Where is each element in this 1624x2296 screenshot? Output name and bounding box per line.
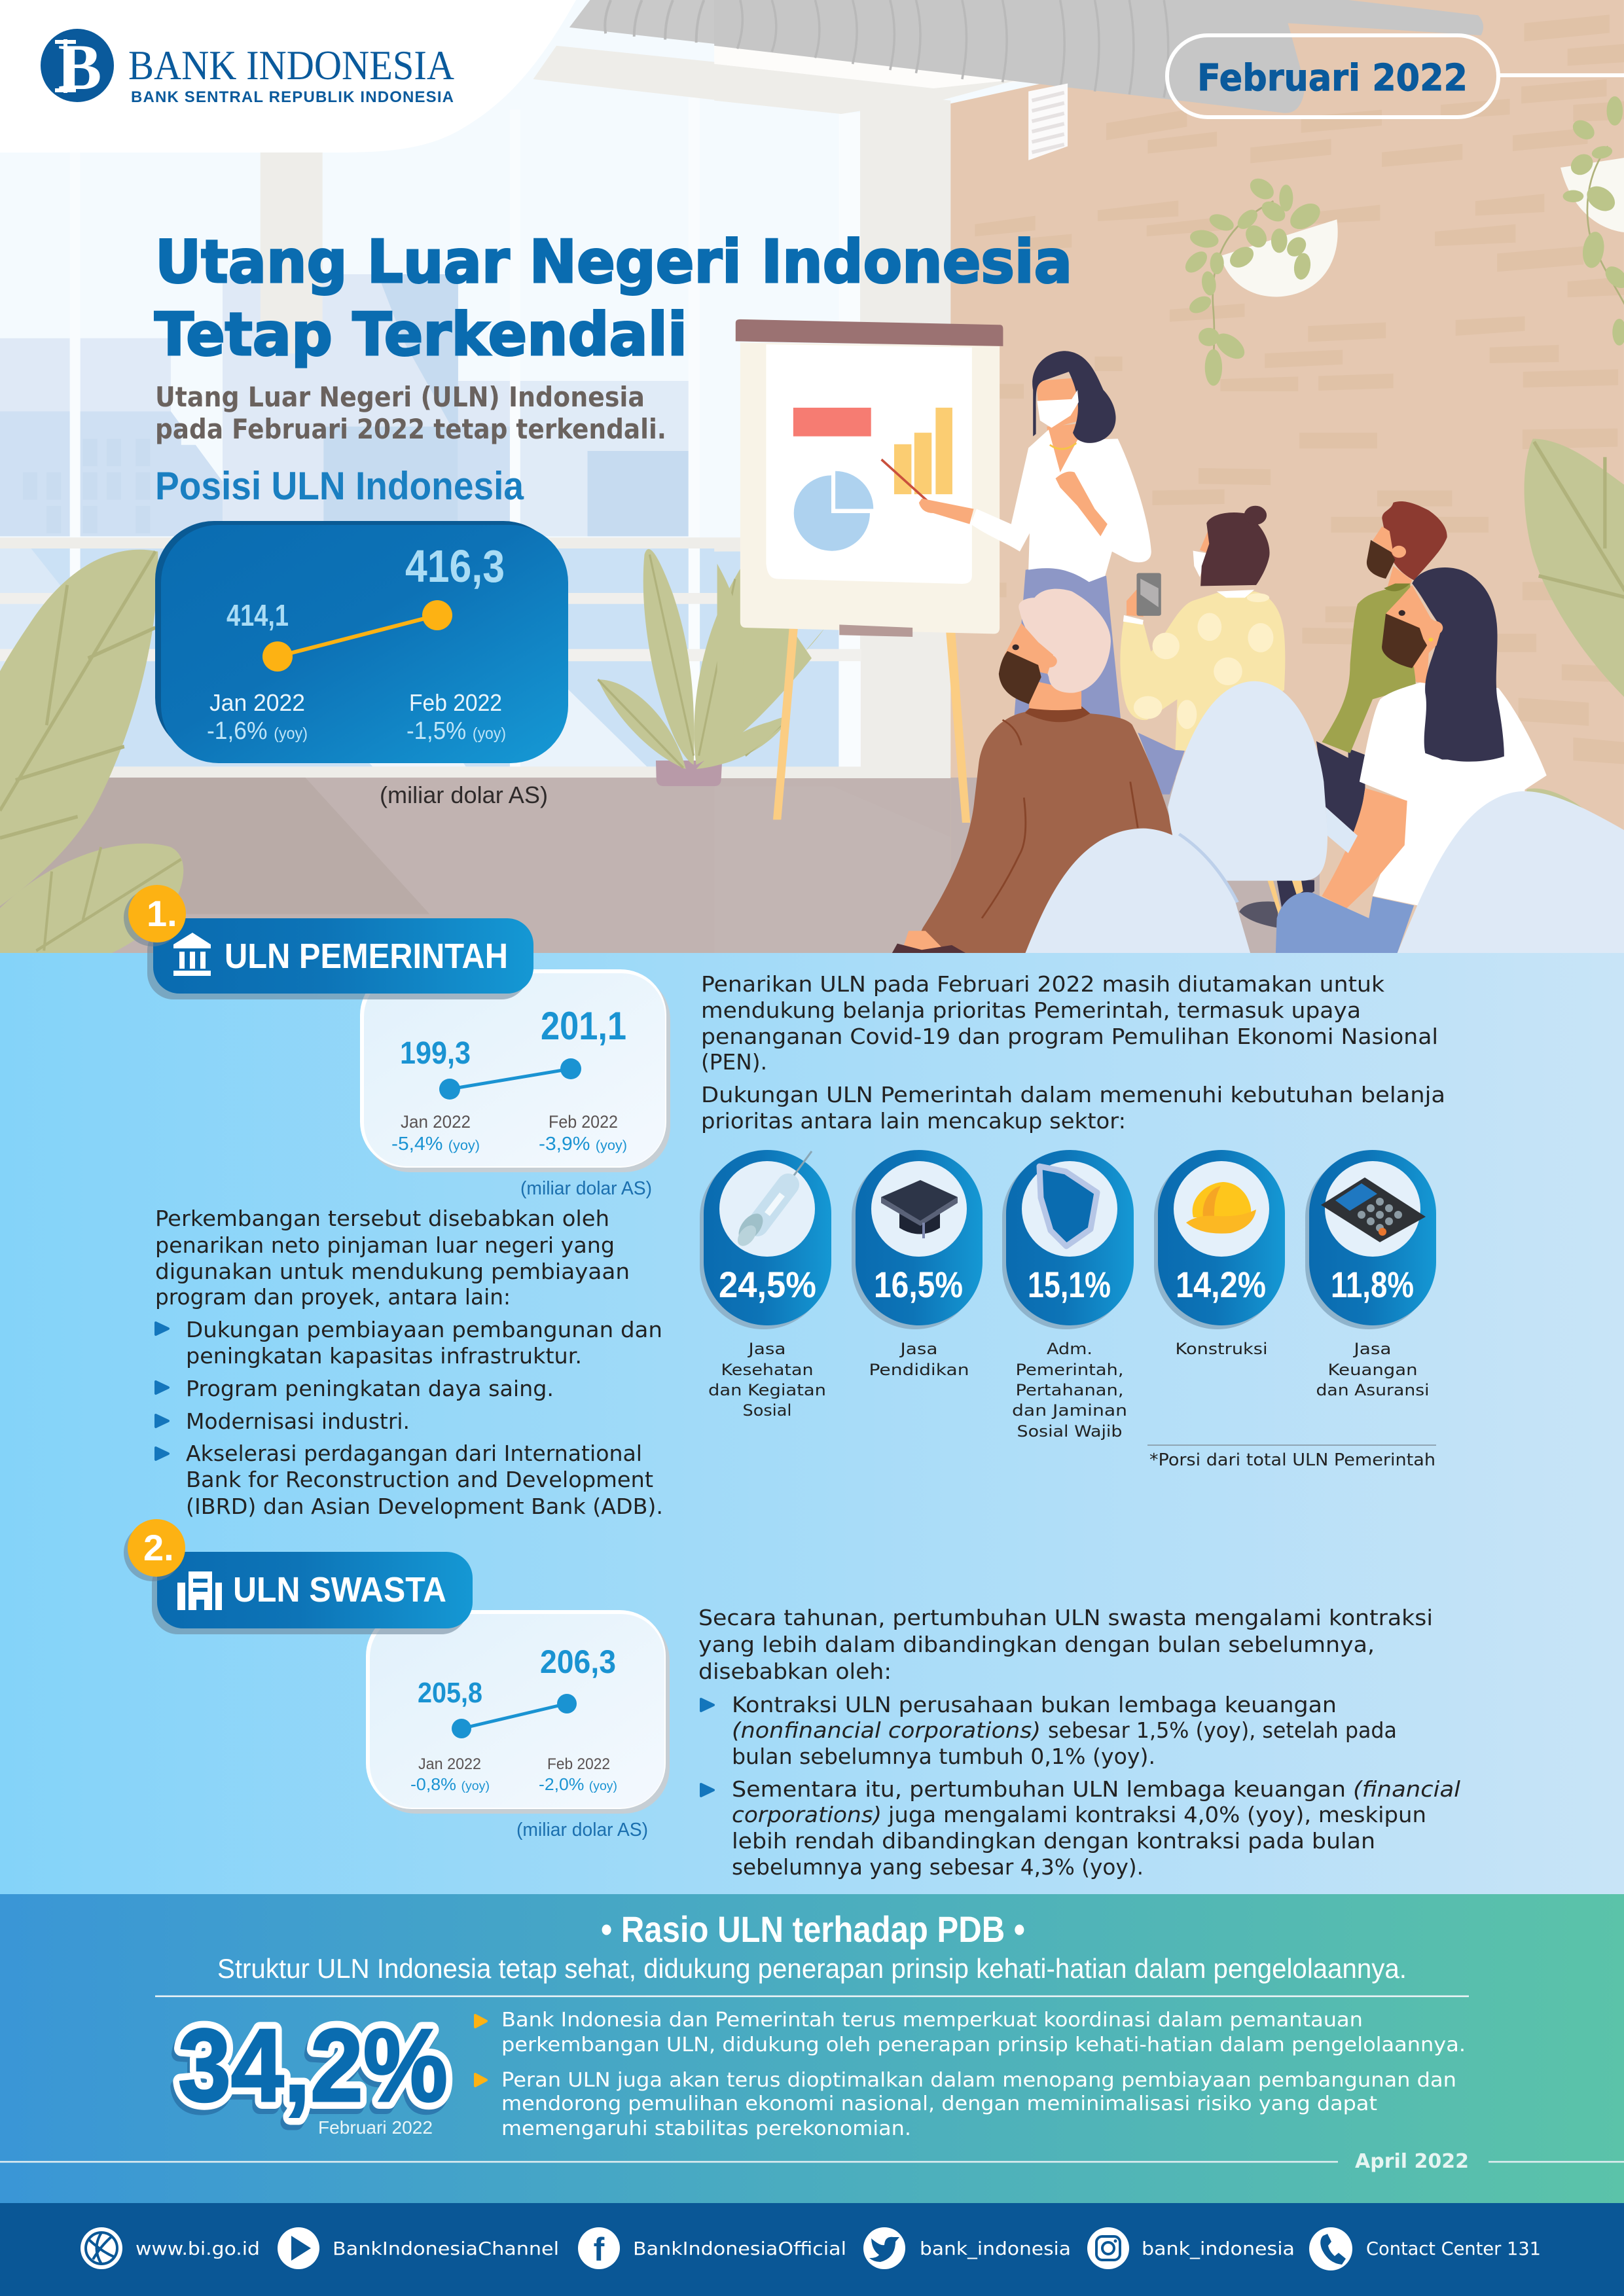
section header: ULN Pemerintah: ULN PEMERINTAH bbox=[225, 937, 508, 976]
line chart bbox=[439, 1058, 581, 1100]
panel: debt to GDP ratio bbox=[0, 1894, 1624, 2204]
bullet list: ratio points: perkembangan ULN, didukung oleh penerapan prinsip kehati-hatian dalam pengelolaannya. bbox=[501, 2034, 1466, 2056]
month and yoy labels: Feb 2022 bbox=[409, 689, 502, 716]
label: health: Sosial bbox=[742, 1401, 792, 1420]
badge 1: 1. bbox=[147, 893, 177, 934]
bullet list: government programs: Dukungan pembiayaan pembangunan dan bbox=[186, 1317, 662, 1342]
panel: total debt position chart bbox=[155, 521, 568, 763]
man in green shirt bbox=[1316, 501, 1447, 836]
text block: private debt explanation bbox=[698, 1605, 1433, 1684]
logo mark bbox=[41, 29, 114, 103]
bullet list: ratio points bbox=[475, 2009, 1466, 2140]
logo: Bank Indonesia bbox=[41, 29, 454, 106]
flipchart chart graphics bbox=[793, 408, 871, 437]
capsule: public administration 15,1% bbox=[1002, 1150, 1134, 1329]
text block: government debt explanation: penarikan neto pinjaman luar negeri yang bbox=[155, 1232, 615, 1258]
woman with long dark hair in white t-shirt bbox=[1239, 567, 1547, 954]
month and yoy labels bbox=[391, 1112, 627, 1155]
month and yoy labels: -3,9% (yoy) bbox=[539, 1134, 627, 1155]
month and yoy labels bbox=[207, 689, 506, 745]
line chart bbox=[262, 600, 452, 672]
bullet list: private debt details bbox=[701, 1692, 1460, 1880]
section header: ULN Pemerintah bbox=[124, 885, 533, 999]
text block: withdrawals and sector support: Dukungan ULN Pemerintah dalam memenuhi kebutuhan belanja bbox=[701, 1082, 1445, 1107]
publication date: April 2022 bbox=[1355, 2150, 1469, 2173]
text block: government debt explanation bbox=[155, 1206, 630, 1310]
panel: ULN Swasta chart card bbox=[366, 1610, 670, 1814]
month and yoy labels: Jan 2022 bbox=[418, 1755, 481, 1773]
plant: large leaves left bbox=[0, 550, 183, 963]
unit note: (miliar dolar AS) bbox=[516, 1820, 648, 1840]
plant: leaves behind flipchart bbox=[717, 564, 825, 765]
presenter bbox=[1014, 568, 1121, 719]
logo wordmark: BANK INDONESIA bbox=[128, 42, 454, 88]
big number 34,2%: 34,2% bbox=[178, 2008, 448, 2123]
icon: office buildings bbox=[177, 1571, 222, 1610]
values: 205,8 bbox=[418, 1677, 482, 1709]
logo mark: B bbox=[58, 31, 101, 103]
month and yoy labels: Jan 2022 bbox=[401, 1112, 471, 1132]
date pill bbox=[1167, 35, 1624, 117]
big number 34,2%: 34,2% bbox=[178, 2008, 448, 2123]
label: health: Jasa bbox=[747, 1340, 785, 1358]
footer text: instagram: bank_indonesia bbox=[1142, 2238, 1295, 2259]
bullet list: ratio points: Bank Indonesia dan Pemerintah terus memperkuat koordinasi dalam pemantauan bbox=[501, 2009, 1363, 2032]
values bbox=[226, 541, 505, 632]
values: 206,3 bbox=[540, 1643, 616, 1680]
label: public administration: Pemerintah, bbox=[1016, 1361, 1123, 1379]
label: public administration: Pertahanan, bbox=[1016, 1381, 1123, 1399]
footer text: twitter: bank_indonesia bbox=[920, 2238, 1071, 2259]
values: 414,1 bbox=[226, 598, 289, 632]
values bbox=[400, 1004, 626, 1071]
bullet list: ratio points: mendorong pemulihan ekonomi nasional, dengan meminimalisasi risiko yang dapat bbox=[501, 2092, 1377, 2115]
footer bbox=[0, 2203, 1624, 2296]
big number 34,2%: 34,2% bbox=[175, 2013, 445, 2128]
label: health: Kesehatan bbox=[721, 1361, 813, 1379]
icon: graduation cap bbox=[881, 1180, 958, 1238]
label: public administration: Adm. bbox=[1047, 1340, 1092, 1358]
label: finance bbox=[1316, 1340, 1430, 1399]
planter on wall bbox=[1182, 174, 1338, 386]
text block: private debt explanation: yang lebih dalam dibandingkan dengan bulan sebelumnya, bbox=[698, 1632, 1375, 1657]
subtitle bbox=[155, 381, 666, 445]
illustration: audience bbox=[892, 501, 1624, 954]
text block: withdrawals and sector support: (PEN). bbox=[701, 1049, 767, 1075]
bullet list: government programs: peningkatan kapasitas infrastruktur. bbox=[186, 1343, 582, 1369]
section header: ULN Swasta: ULN SWASTA bbox=[233, 1570, 446, 1609]
month and yoy labels: -1,6% (yoy) bbox=[207, 717, 308, 745]
text block: government debt explanation: digunakan untuk mendukung pembiayaan bbox=[155, 1259, 630, 1284]
values bbox=[418, 1643, 616, 1709]
man with grey hair in brown sweater bbox=[892, 589, 1174, 954]
bullet list: ratio points: memengaruhi stabilitas perekonomian. bbox=[501, 2117, 911, 2140]
month and yoy labels: -2,0% (yoy) bbox=[539, 1774, 617, 1794]
bullet list: private debt details: juga mengalami kontraksi 4,0% (yoy), meskipun bbox=[888, 1802, 1426, 1827]
capsule: construction 14,2%: 14,2% bbox=[1176, 1264, 1266, 1305]
label: finance: dan Asuransi bbox=[1316, 1381, 1430, 1399]
sector labels bbox=[708, 1340, 1430, 1441]
label: public administration: dan Jaminan bbox=[1012, 1401, 1127, 1420]
capsule: health 24,5%: 24,5% bbox=[719, 1264, 816, 1305]
unit note: (miliar dolar AS) bbox=[380, 781, 548, 808]
logo tagline: BANK SENTRAL REPUBLIK INDONESIA bbox=[131, 88, 454, 106]
badge 2 bbox=[124, 1519, 185, 1581]
text block: withdrawals and sector support: penanganan Covid-19 dan program Pemulihan Ekonomi Nasional bbox=[701, 1024, 1438, 1049]
icon: phone bbox=[1309, 2227, 1352, 2270]
bullet list: government programs bbox=[156, 1317, 663, 1519]
capsule: health 24,5% bbox=[700, 1150, 831, 1329]
icon: calculator bbox=[1321, 1177, 1426, 1242]
illustration: flipchart and presenter bbox=[717, 96, 1624, 957]
values: 416,3 bbox=[405, 541, 505, 592]
label: public administration bbox=[1012, 1340, 1127, 1441]
text block: withdrawals and sector support: mendukung belanja prioritas Pemerintah, termasuk upaya bbox=[701, 997, 1361, 1023]
subheading: Struktur ULN Indonesia tetap sehat, didukung penerapan prinsip kehati-hatian dalam pengelolaannya. bbox=[217, 1953, 1407, 1984]
main content background bbox=[0, 953, 1624, 1895]
capsule: construction 14,2% bbox=[1154, 1150, 1285, 1329]
icon: website bbox=[81, 2227, 122, 2269]
line chart bbox=[452, 1694, 577, 1738]
text block: withdrawals and sector support: prioritas antara lain mencakup sektor: bbox=[701, 1108, 1126, 1134]
flipchart board bbox=[740, 342, 1000, 634]
month and yoy labels: Jan 2022 bbox=[209, 689, 305, 716]
label: finance: Keuangan bbox=[1327, 1361, 1418, 1379]
subtitle: Utang Luar Negeri (ULN) Indonesia bbox=[155, 381, 645, 413]
label: finance: Jasa bbox=[1352, 1340, 1392, 1358]
bullet list: government programs: (IBRD) dan Asian Development Bank (ADB). bbox=[186, 1494, 663, 1519]
label: education bbox=[869, 1340, 969, 1379]
icon: twitter bbox=[863, 2227, 905, 2269]
label: health bbox=[708, 1340, 826, 1420]
heading: • Rasio ULN terhadap PDB • bbox=[601, 1909, 1025, 1950]
values: 199,3 bbox=[400, 1036, 471, 1071]
title: Tetap Terkendali bbox=[154, 300, 687, 369]
plant: potted plant behind card bbox=[598, 549, 812, 786]
ratio date: Februari 2022 bbox=[318, 2117, 433, 2138]
footer text: facebook: BankIndonesiaOfficial bbox=[633, 2238, 846, 2259]
icon: helmet bbox=[1186, 1182, 1256, 1234]
text block: withdrawals and sector support bbox=[701, 971, 1445, 1134]
month and yoy labels: -5,4% (yoy) bbox=[391, 1134, 480, 1155]
bullet list: private debt details: Sementara itu, pertumbuhan ULN lembaga keuangan bbox=[732, 1776, 1346, 1802]
month and yoy labels: Feb 2022 bbox=[549, 1112, 618, 1132]
bullet list: private debt details: sebesar 1,5% (yoy), setelah pada bbox=[1048, 1717, 1397, 1743]
heading: Posisi ULN Indonesia: Posisi ULN Indonesia bbox=[155, 464, 524, 508]
month and yoy labels: -1,5% (yoy) bbox=[406, 717, 506, 745]
plant: right leaf bbox=[1525, 439, 1624, 701]
label: public administration: Sosial Wajib bbox=[1017, 1422, 1122, 1441]
capsule: finance 11,8% bbox=[1305, 1150, 1436, 1329]
capsule: education 16,5% bbox=[852, 1150, 983, 1329]
planter at right edge bbox=[1561, 96, 1624, 346]
text block: private debt explanation: disebabkan oleh: bbox=[698, 1659, 892, 1684]
icon: youtube bbox=[278, 2227, 319, 2269]
badge 2: 2. bbox=[143, 1527, 174, 1568]
bullet list: government programs: Akselerasi perdagangan dari International bbox=[186, 1441, 642, 1466]
date pill: Februari 2022 bbox=[1197, 57, 1468, 99]
bullet list: government programs: Modernisasi industri. bbox=[186, 1408, 410, 1434]
month and yoy labels: Feb 2022 bbox=[547, 1755, 610, 1773]
icon: facebook bbox=[578, 2227, 620, 2269]
panel: ULN Pemerintah chart card bbox=[360, 969, 670, 1172]
icon: instagram bbox=[1087, 2227, 1129, 2269]
illustration: office presentation scene bbox=[0, 0, 1624, 963]
footer text: contact center: Contact Center 131 bbox=[1366, 2238, 1541, 2259]
subtitle: pada Februari 2022 tetap terkendali. bbox=[155, 413, 666, 445]
text block: government debt explanation: Perkembangan tersebut disebabkan oleh bbox=[155, 1206, 609, 1231]
bullet list: private debt details: (financial bbox=[1353, 1776, 1460, 1802]
badge 1 bbox=[124, 885, 186, 946]
label: construction: Konstruksi bbox=[1176, 1340, 1267, 1358]
icon: facebook: f bbox=[594, 2231, 605, 2268]
label: education: Jasa bbox=[899, 1340, 937, 1358]
text block: withdrawals and sector support: Penarikan ULN pada Februari 2022 masih diutamakan untuk bbox=[701, 971, 1385, 997]
bullet list: private debt details: corporations) bbox=[732, 1802, 882, 1827]
icon: government building bbox=[173, 933, 211, 976]
label: health: dan Kegiatan bbox=[708, 1381, 826, 1399]
unit note: (miliar dolar AS) bbox=[520, 1178, 652, 1199]
icon: shield bbox=[1039, 1166, 1097, 1246]
bullet list: ratio points: Peran ULN juga akan terus dioptimalkan dalam menopang pembiayaan pembangunan dan bbox=[501, 2069, 1456, 2092]
bullet list: government programs: Bank for Reconstruction and Development bbox=[186, 1467, 653, 1492]
bullet list: private debt details: sebelumnya yang sebesar 4,3% (yoy). bbox=[732, 1854, 1144, 1880]
bullet list: private debt details: lebih rendah dibandingkan dengan kontraksi pada bulan bbox=[732, 1828, 1375, 1854]
capsule: public administration 15,1%: 15,1% bbox=[1028, 1264, 1111, 1305]
text block: government debt explanation: program dan proyek, antara lain: bbox=[155, 1284, 511, 1310]
section header: ULN Swasta bbox=[124, 1519, 473, 1634]
capsule: finance 11,8%: 11,8% bbox=[1331, 1264, 1414, 1305]
label: education: Pendidikan bbox=[869, 1361, 969, 1379]
footnote: *Porsi dari total ULN Pemerintah bbox=[1149, 1450, 1435, 1470]
bullet list: private debt details: (nonfinancial corporations) bbox=[732, 1717, 1041, 1743]
woman in yellow sweater bbox=[1120, 506, 1285, 795]
chairs bbox=[1025, 681, 1624, 954]
icon: syringe bbox=[734, 1151, 812, 1249]
easel legs bbox=[773, 628, 970, 823]
white header blob bbox=[0, 0, 576, 152]
values: 201,1 bbox=[541, 1004, 626, 1048]
bullet list: private debt details: bulan sebelumnya tumbuh 0,1% (yoy). bbox=[732, 1744, 1155, 1769]
bullet list: government programs: Program peningkatan daya saing. bbox=[186, 1376, 554, 1401]
title bbox=[154, 228, 1072, 369]
text block: private debt explanation: Secara tahunan, pertumbuhan ULN swasta mengalami kontraksi bbox=[698, 1605, 1433, 1630]
month and yoy labels bbox=[410, 1755, 617, 1794]
bullet list: private debt details: Kontraksi ULN perusahaan bukan lembaga keuangan bbox=[732, 1692, 1337, 1717]
title: Utang Luar Negeri Indonesia bbox=[155, 228, 1072, 296]
footer text: website: www.bi.go.id bbox=[135, 2238, 260, 2259]
month and yoy labels: -0,8% (yoy) bbox=[410, 1774, 490, 1794]
capsule: education 16,5%: 16,5% bbox=[874, 1264, 963, 1305]
footer text: youtube: BankIndonesiaChannel bbox=[333, 2238, 559, 2259]
